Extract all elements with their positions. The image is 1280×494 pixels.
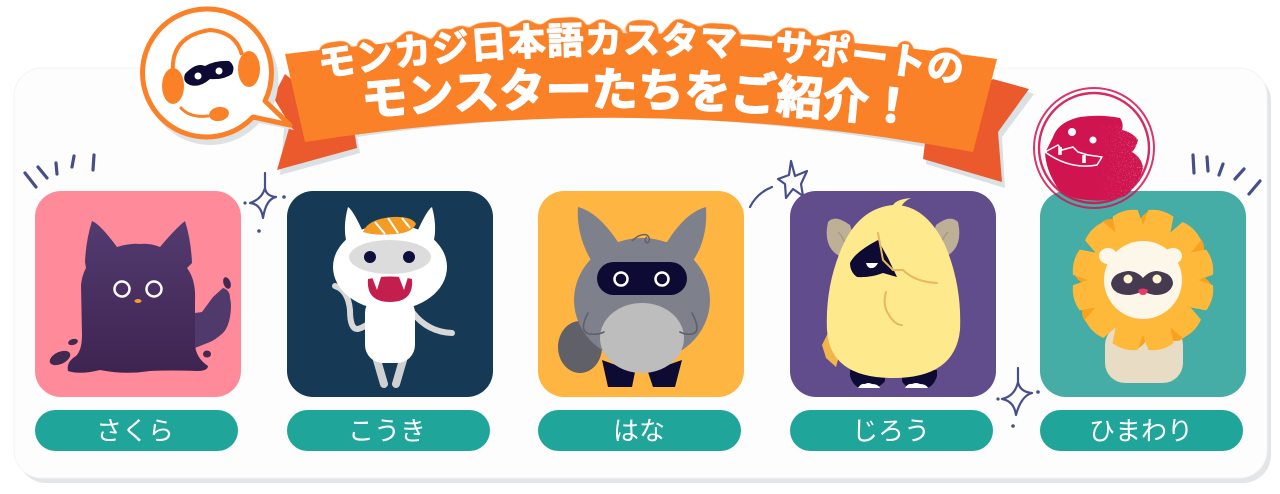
card background	[790, 191, 996, 397]
name pill	[790, 410, 993, 451]
name pill	[35, 410, 238, 451]
decoration: sparkle right	[996, 368, 1040, 428]
name pill	[538, 410, 741, 451]
name pill: さくら	[96, 416, 174, 446]
card background	[35, 191, 241, 397]
decoration: ticks top left	[25, 155, 94, 187]
ribbon left tail	[273, 74, 357, 170]
bubble	[143, 9, 290, 137]
card: はな	[538, 191, 744, 451]
headset	[173, 30, 242, 73]
name pill: こうき	[348, 416, 426, 446]
title line 2: モンスターたちをご紹介！	[365, 68, 898, 124]
petals front layer	[1070, 207, 1216, 353]
card: ひまわり	[1040, 191, 1246, 451]
character: yellow sheep	[822, 198, 960, 388]
ribbon shadow	[280, 82, 1034, 188]
petals back layer	[1070, 207, 1216, 353]
title line 1: モンカジ日本語カスタマーサポートの	[318, 16, 962, 83]
icon: support monster speech bubble	[143, 9, 294, 145]
ribbon main band	[285, 33, 997, 152]
character: grey raccoon	[558, 207, 710, 387]
card: こうき	[287, 191, 493, 451]
name pill: はな	[613, 416, 665, 446]
name pill: ひまわり	[1089, 416, 1193, 446]
decoration: sparkle left	[243, 173, 286, 233]
card: さくら	[35, 191, 241, 451]
banner ribbon	[273, 33, 1034, 188]
card background	[538, 191, 744, 397]
ribbon right tail	[923, 79, 1029, 182]
character: white sushi monster	[333, 207, 452, 384]
name pill	[287, 410, 490, 451]
decoration: star	[750, 161, 807, 207]
character: sunflower lion	[1070, 207, 1216, 383]
bubble shadow	[145, 15, 294, 145]
card background	[287, 191, 493, 397]
decoration: ticks top right	[1193, 155, 1260, 194]
name pill	[1040, 410, 1243, 451]
title	[318, 16, 962, 124]
mask	[184, 61, 233, 86]
name pill: じろう	[852, 416, 930, 446]
card: じろう	[790, 191, 996, 451]
stamp: red monster seal	[1034, 88, 1154, 208]
character: black cat blob	[47, 221, 232, 373]
card background	[1040, 191, 1246, 397]
